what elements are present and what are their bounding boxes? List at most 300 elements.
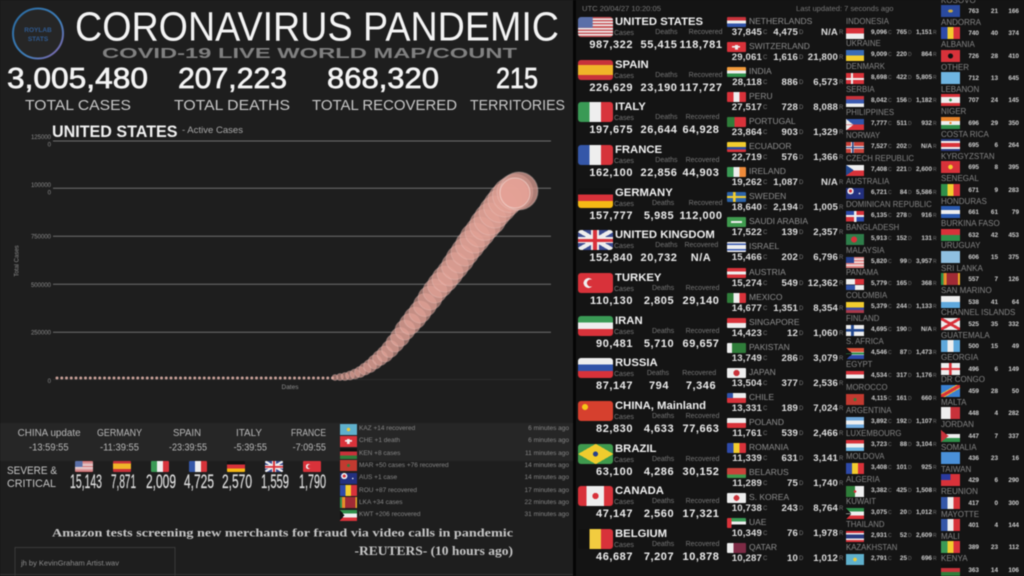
- country row: Kyrgyzstan: 695: [968, 164, 979, 171]
- chart: active cases bubble line: 0: [48, 142, 52, 148]
- country row: Malaysia: [844, 246, 939, 268]
- country row: Panama: 165: [896, 280, 907, 287]
- country row: Sri Lanka: SRI LANKA: [941, 264, 983, 273]
- country row: Brazil: [577, 443, 720, 478]
- country row: Channel Islands: CHANNEL ISLANDS: [941, 308, 1015, 317]
- country row: Algeria: C: [888, 488, 892, 494]
- country row: Japan: [726, 367, 844, 389]
- country row: Egypt: R: [933, 373, 937, 379]
- country row: Chile: [726, 392, 844, 414]
- country row: Bangladesh: 152: [896, 235, 907, 242]
- country row: Mexico: [726, 292, 844, 314]
- country row: Portugal: 903: [782, 127, 798, 138]
- country row: Albania: 410: [1008, 53, 1019, 60]
- country row: Argentina: R: [933, 419, 937, 425]
- country row: Canada: Cases: [614, 499, 634, 506]
- country row: Indonesia: 1,151: [916, 28, 932, 36]
- country row: Kazakhstan: 2,791: [871, 555, 887, 562]
- country row: Morocco: 660: [921, 395, 932, 402]
- country row: Chile: C: [763, 406, 767, 412]
- country row: Bangladesh: 5,913: [871, 235, 887, 242]
- country row: Turkey: 110,130: [590, 295, 633, 307]
- chart: active cases bubble line: 500000: [31, 283, 52, 289]
- country row: Dominican Republic: DOMINICAN REPUBLIC: [846, 200, 932, 209]
- country row: Germany: GERMANY: [615, 187, 673, 199]
- country row: Malta: [940, 398, 1024, 420]
- country row: United States: 118,781: [679, 39, 723, 51]
- country row: France: [577, 144, 720, 179]
- country row: Kuwait: 20: [900, 509, 907, 516]
- country row: Belgium: [588, 528, 720, 563]
- countdown: Italy: -5:39:55: [234, 442, 267, 454]
- country row: DR Congo: 28: [991, 388, 998, 395]
- country row: Kazakhstan: KAZAKHSTAN: [846, 543, 897, 552]
- country row: Australia: 5,586: [916, 189, 932, 196]
- country row: China: Recovered: [686, 413, 719, 420]
- country row: Honduras: 661: [968, 209, 979, 216]
- chart: active cases bubble line: Total Cases: [14, 245, 20, 277]
- country row: Panama: D: [908, 281, 912, 287]
- country row: Thailand: R: [933, 533, 937, 539]
- country row: Saudi Arabia: 139: [782, 227, 798, 238]
- stat: total recovered: TOTAL RECOVERED: [312, 97, 457, 114]
- country row: Austria: 15,274: [732, 278, 762, 288]
- country row: Sri Lanka: 557: [968, 276, 979, 283]
- country row: Serbia: 8,042: [871, 97, 887, 104]
- country row: Niger: [940, 107, 1024, 129]
- country row: Netherlands: C: [763, 30, 767, 36]
- country row: Finland: R: [933, 327, 937, 333]
- country row: Sweden: 2,194: [773, 202, 798, 213]
- country row: Peru: D: [799, 105, 803, 111]
- country row: Pakistan: R: [839, 356, 843, 362]
- country row: Russia: RUSSIA: [615, 357, 658, 369]
- country row: Somalia: SOMALIA: [941, 442, 977, 452]
- country row: Qatar: C: [763, 556, 767, 562]
- country row: Germany: Recovered: [689, 200, 723, 207]
- title: CORONAVIRUS PANDEMIC: [75, 4, 559, 50]
- country row: Ireland: [726, 166, 844, 188]
- country row: Thailand: 2,931: [871, 532, 887, 539]
- chart: active cases bubble line: 0: [48, 190, 52, 196]
- country row: Serbia: 1,182: [916, 97, 932, 104]
- country row: Spain: [577, 59, 723, 94]
- country row: Ireland: 19,262: [732, 177, 762, 188]
- country row: Uruguay: 375: [1008, 254, 1019, 261]
- country row: Switzerland: 21,800: [808, 52, 838, 63]
- country row: Mexico: R: [839, 306, 843, 312]
- country row: Indonesia: 765: [896, 28, 907, 36]
- country row: Belarus: D: [799, 481, 803, 487]
- country row: United Kingdom: Deaths: [655, 242, 677, 249]
- country row: Algeria: R: [933, 488, 937, 494]
- panel: header and chart: [0, 4, 572, 576]
- country row: Poland: [725, 416, 844, 440]
- country row: Georgia: 496: [968, 366, 979, 373]
- country row: Iran: Recovered: [686, 328, 719, 335]
- country row: UAE: 1,978: [813, 528, 838, 539]
- country row: Saudi Arabia: SAUDI ARABIA: [749, 216, 808, 226]
- country row: Burkina Faso: [940, 219, 1024, 241]
- country row: India: D: [799, 80, 803, 86]
- countdown: Italy: [234, 428, 267, 454]
- country row: Iran: [577, 315, 720, 350]
- country row: Turkey: 29,140: [683, 295, 719, 307]
- country row: Peru: PERU: [749, 91, 773, 101]
- country row: Ukraine: R: [933, 52, 937, 58]
- country row: Egypt: [844, 360, 939, 382]
- country row: Peru: 728: [782, 102, 798, 113]
- country row: Switzerland: C: [763, 55, 767, 61]
- country row: Portugal: R: [839, 130, 843, 136]
- news headline: -REUTERS- (10 hours ago): [354, 543, 513, 558]
- country row: Dominican Republic: 278: [896, 212, 907, 219]
- country row: Switzerland: [726, 41, 844, 63]
- country row: Belarus: 1,740: [813, 478, 838, 489]
- country row: Netherlands: 37,845: [732, 27, 762, 38]
- country row: Taiwan: 290: [1008, 477, 1019, 484]
- country row: Brazil: 30,152: [683, 466, 719, 478]
- country row: Georgia: [940, 353, 1024, 375]
- country row: Luxembourg: C: [888, 442, 892, 448]
- country row: Argentina: 192: [896, 418, 907, 425]
- country row: Philippines: 511: [897, 120, 907, 127]
- country row: Australia: AUSTRALIA: [846, 177, 889, 186]
- country row: India: C: [763, 80, 767, 86]
- country row: Philippines: D: [908, 121, 912, 127]
- country row: Italy: [577, 101, 720, 136]
- stat: total recovered: [312, 63, 457, 114]
- country row: Dominican Republic: D: [908, 213, 912, 219]
- country row: Morocco: MOROCCO: [846, 383, 888, 392]
- country row: Poland: 11,761: [732, 428, 762, 439]
- stat: territories: 215: [496, 63, 538, 95]
- country row: Denmark: [844, 62, 939, 84]
- country row: Andorra: 740: [968, 30, 979, 37]
- country row: Mali: 112: [1009, 544, 1019, 551]
- country row: Romania: 3,141: [813, 453, 838, 464]
- country row: Colombia: 1,133: [916, 303, 932, 310]
- country row: Peru: C: [763, 105, 767, 111]
- country row: India: R: [839, 80, 843, 86]
- panel: countdown band: [0, 423, 573, 461]
- country row: Russia: Deaths: [647, 370, 669, 377]
- country row: Kazakhstan: D: [908, 556, 912, 562]
- country row: Switzerland: 1,616: [773, 52, 798, 63]
- country row: United States: [577, 16, 723, 51]
- country row: Egypt: C: [888, 373, 892, 379]
- chart: active cases bubble line: [14, 135, 551, 391]
- country row: Czech Republic: 221: [896, 166, 907, 173]
- country row: Guatemala: 49: [1012, 343, 1019, 350]
- country row: Andorra: ANDORRA: [941, 18, 981, 27]
- ticker row: Switzerland: 6 minutes ago: [528, 437, 569, 444]
- chart: active cases bubble line: 750000: [31, 234, 52, 240]
- country row: United Kingdom: Recovered: [684, 242, 718, 249]
- country row: UAE: C: [763, 531, 767, 537]
- country row: Poland: POLAND: [749, 417, 784, 427]
- country row: Andorra: 40: [991, 30, 998, 37]
- country row: Turkey: 2,805: [644, 295, 674, 307]
- country row: United Kingdom: UNITED KINGDOM: [615, 229, 715, 241]
- country row: Colombia: COLOMBIA: [846, 291, 887, 300]
- country row: Mexico: 8,354: [813, 302, 838, 314]
- country row: Moldova: MOLDOVA: [846, 452, 884, 461]
- country row: Burkina Faso: 453: [1008, 232, 1019, 238]
- country row: Ecuador: [726, 141, 844, 163]
- country row: Pakistan: D: [799, 356, 803, 362]
- country row: Moldova: C: [888, 465, 892, 471]
- country row: Switzerland: 29,061: [732, 52, 762, 63]
- country row: Portugal: 1,329: [813, 127, 838, 138]
- country row: Luxembourg: LUXEMBOURG: [846, 429, 901, 438]
- country row: Poland: 539: [782, 428, 798, 439]
- country row: Taiwan: 429: [968, 477, 979, 484]
- country row: Singapore: SINGAPORE: [749, 317, 800, 327]
- countdown: Spain: [169, 428, 207, 454]
- country row: Moldova: D: [908, 465, 912, 471]
- country row: Taiwan: TAIWAN: [941, 465, 971, 474]
- country row: Panama: C: [888, 281, 892, 287]
- country row: Israel: R: [839, 255, 843, 261]
- country row: Ecuador: D: [799, 155, 803, 161]
- country row: Singapore: D: [799, 331, 803, 337]
- country row: Mayotte: [940, 510, 1024, 532]
- country row: Iran: Deaths: [652, 328, 674, 335]
- country row: Japan: JAPAN: [749, 367, 776, 377]
- country row: Ecuador: 1,366: [813, 152, 838, 163]
- country row: Niger: 696: [968, 120, 979, 127]
- country row: Brazil: 63,100: [596, 466, 633, 478]
- country row: Argentina: 1,107: [916, 418, 932, 425]
- chart: active cases bubble line: 100000: [31, 183, 52, 189]
- country row: South Korea: R: [839, 506, 843, 512]
- country row: Bangladesh: [844, 223, 939, 245]
- country row: Romania: ROMANIA: [749, 442, 789, 452]
- country row: Netherlands: D: [799, 30, 803, 36]
- country row: Sweden: R: [839, 205, 843, 211]
- country row: Chile: R: [839, 406, 843, 412]
- country row: Netherlands: N/A: [821, 27, 838, 38]
- ticker row: Kazakhstan: 6 minutes ago: [528, 425, 569, 432]
- severe and critical numbers: 2,570: [222, 471, 252, 493]
- country row: Italy: Recovered: [686, 114, 719, 121]
- country row: Sweden: [726, 191, 844, 213]
- country row: Malaysia: D: [908, 258, 912, 264]
- country row: Thailand: C: [888, 533, 892, 539]
- country row: Norway: [844, 131, 939, 153]
- country row: South Africa: [844, 337, 939, 359]
- country row: Bangladesh: D: [908, 236, 912, 242]
- country row: Brazil: 4,286: [644, 466, 674, 478]
- country row: Netherlands: [726, 16, 844, 38]
- country row: Ukraine: 864: [921, 51, 932, 58]
- country row: France: 162,100: [589, 167, 633, 179]
- country row: India: [726, 66, 844, 88]
- country row: Netherlands: 4,475: [773, 27, 798, 38]
- country row: South Africa: R: [933, 350, 937, 356]
- country row: Germany: [577, 187, 723, 222]
- panel divider: [573, 0, 576, 576]
- country row: Denmark: 422: [896, 74, 907, 81]
- chart: active cases bubble line: Dates: [282, 384, 299, 391]
- country row: Ukraine: D: [908, 52, 912, 58]
- country row: Argentina: ARGENTINA: [846, 406, 892, 415]
- stat: total recovered: 868,320: [327, 63, 439, 95]
- country row: Austria: 12,362: [808, 278, 838, 288]
- country row: Kosovo: 166: [1008, 8, 1019, 15]
- country row: France: FRANCE: [615, 144, 662, 156]
- country row: Turkey: [577, 272, 720, 307]
- country row: Albania: ALBANIA: [941, 40, 975, 49]
- country row: Colombia: [844, 291, 939, 313]
- country row: Lebanon: 145: [1008, 97, 1019, 104]
- country row: Thailand: 52: [900, 532, 907, 539]
- country row: Dominican Republic: 6,135: [871, 212, 887, 219]
- country row: United States: 987,322: [589, 39, 633, 51]
- country row: Finland: N/A: [921, 326, 932, 333]
- country row: Indonesia: D: [908, 30, 912, 36]
- country row: Qatar: D: [799, 556, 803, 562]
- country row: Poland: D: [799, 431, 803, 437]
- ticker row: Romania: [339, 484, 570, 497]
- country row: Andorra: [940, 18, 1024, 40]
- country row: Morocco: 161: [896, 395, 907, 402]
- country row: Sweden: C: [763, 205, 767, 211]
- country row: Portugal: D: [799, 130, 803, 136]
- country row: Costa Rica: 6: [994, 142, 998, 149]
- country row: Turkey: TURKEY: [615, 272, 661, 284]
- country row: Spain: Cases: [614, 73, 634, 80]
- country row: Belarus: C: [763, 481, 767, 487]
- country row: Egypt: 1,176: [916, 372, 932, 379]
- ticker row: Sri Lanka: [339, 496, 570, 509]
- country row: Somalia: 23: [991, 455, 998, 462]
- country row: Lebanon: 24: [991, 97, 998, 104]
- country row: Malta: MALTA: [941, 398, 966, 407]
- country row: Chile: D: [799, 406, 803, 412]
- country row: Malaysia: 3,957: [916, 258, 932, 264]
- timestamp UTC: UTC 20/04/27 10:20:05: [582, 4, 661, 13]
- country row: Belgium: Deaths: [652, 541, 674, 548]
- severe and critical label: [7, 465, 58, 490]
- country row: Italy: 26,644: [641, 124, 677, 136]
- ticker row: Kuwait: [339, 509, 570, 522]
- ticker row: Sri Lanka: LKA +34 cases: [359, 499, 403, 506]
- country row: Niger: NIGER: [941, 107, 966, 116]
- country row: Turkey: Cases: [614, 286, 634, 293]
- now playing box: jh by KevinGraham Artist.wav: [20, 558, 119, 568]
- country row: Egypt: 4,534: [871, 372, 887, 379]
- country row: Norway: 202: [896, 143, 907, 150]
- country row: Sri Lanka: 126: [1008, 276, 1019, 283]
- stat: total deaths: 207,223: [178, 63, 287, 95]
- country row: Moldova: 925: [921, 464, 932, 471]
- country row: Israel: D: [799, 255, 803, 261]
- country row: Austria: [726, 266, 844, 288]
- country row: Chile: CHILE: [749, 392, 774, 402]
- country row: Kuwait: 3,075: [871, 509, 887, 516]
- country row: Philippines: [844, 108, 939, 130]
- country row: Uruguay: URUGUAY: [941, 241, 980, 250]
- country row: Romania: R: [839, 456, 843, 462]
- country row: San Marino: 538: [968, 299, 979, 306]
- country row: Norway: N/A: [921, 143, 932, 150]
- ticker row: Sri Lanka: 22 minutes ago: [525, 499, 569, 506]
- country row: Canada: 47,147: [596, 508, 633, 520]
- country row: UAE: [725, 516, 844, 540]
- country row: Italy: 197,675: [589, 124, 633, 136]
- country row: Japan: R: [839, 381, 843, 387]
- country row: Burkina Faso: 42: [991, 232, 998, 238]
- country row: Honduras: HONDURAS: [941, 197, 987, 206]
- country row: United States: Deaths: [655, 29, 677, 36]
- country row: Reunion: 417: [968, 500, 979, 507]
- country row: Kuwait: D: [908, 510, 912, 516]
- country row: Andorra: 374: [1008, 30, 1019, 37]
- countdown: France: [291, 428, 326, 454]
- country row: France: Recovered: [686, 157, 719, 164]
- country row: Lebanon: 707: [968, 97, 979, 104]
- country row: Jordan: JORDAN: [941, 420, 974, 429]
- country row: Thailand: [844, 520, 939, 542]
- country row: Czech Republic: 2,600: [916, 166, 932, 173]
- country row: Finland: 4,695: [871, 326, 887, 333]
- country row: Canada: [577, 485, 720, 520]
- country row: Spain: SPAIN: [615, 59, 649, 71]
- country row: Algeria: 3,382: [871, 486, 887, 494]
- country row: Burkina Faso: 632: [968, 232, 979, 238]
- ticker row: Morocco: 14 minutes ago: [525, 462, 569, 469]
- chart heading: [52, 123, 243, 141]
- country row: Reunion: 300: [1008, 500, 1019, 507]
- country row: Serbia: SERBIA: [846, 85, 875, 94]
- country row: Bangladesh: R: [933, 236, 937, 242]
- country row: Sri Lanka: 7: [994, 276, 998, 283]
- chart: active cases bubble line: 0: [48, 379, 52, 385]
- icon: Roylab Stats logo: [13, 8, 63, 58]
- country row: Iran: 69,657: [683, 338, 719, 350]
- country row: Finland: FINLAND: [846, 314, 879, 323]
- country row: Somalia: 16: [1012, 455, 1019, 462]
- country row: Russia: Recovered: [682, 370, 716, 377]
- country row: UAE: UAE: [749, 517, 766, 527]
- country row: Ireland: D: [799, 180, 803, 186]
- country row: Iran: 90,481: [596, 338, 633, 350]
- country row: Thailand: D: [908, 533, 912, 539]
- country row: Czech Republic: C: [888, 167, 892, 173]
- country row: Singapore: [726, 317, 844, 339]
- country row: DR Congo: DR CONGO: [941, 375, 985, 384]
- country row: Australia: D: [908, 190, 912, 196]
- country row: Dominican Republic: R: [933, 213, 937, 219]
- country row: Morocco: 4,115: [871, 395, 887, 402]
- country row: Algeria: [844, 474, 939, 496]
- country row: Pakistan: [726, 342, 844, 364]
- country row: Denmark: 5,805: [916, 74, 932, 81]
- country row: Jordan: [940, 420, 1024, 442]
- country row: Singapore: C: [763, 331, 767, 337]
- country row: Norway: NORWAY: [846, 131, 880, 140]
- country row: Pakistan: 3,079: [813, 353, 838, 364]
- country row: Panama: PANAMA: [846, 268, 878, 277]
- country row: Qatar: 10: [787, 553, 798, 564]
- country row: Luxembourg: 88: [900, 441, 907, 448]
- country row: Colombia: D: [908, 304, 912, 310]
- country row: Egypt: D: [908, 373, 912, 379]
- country row: Canada: Recovered: [686, 498, 719, 505]
- country row: Lebanon: [940, 85, 1024, 107]
